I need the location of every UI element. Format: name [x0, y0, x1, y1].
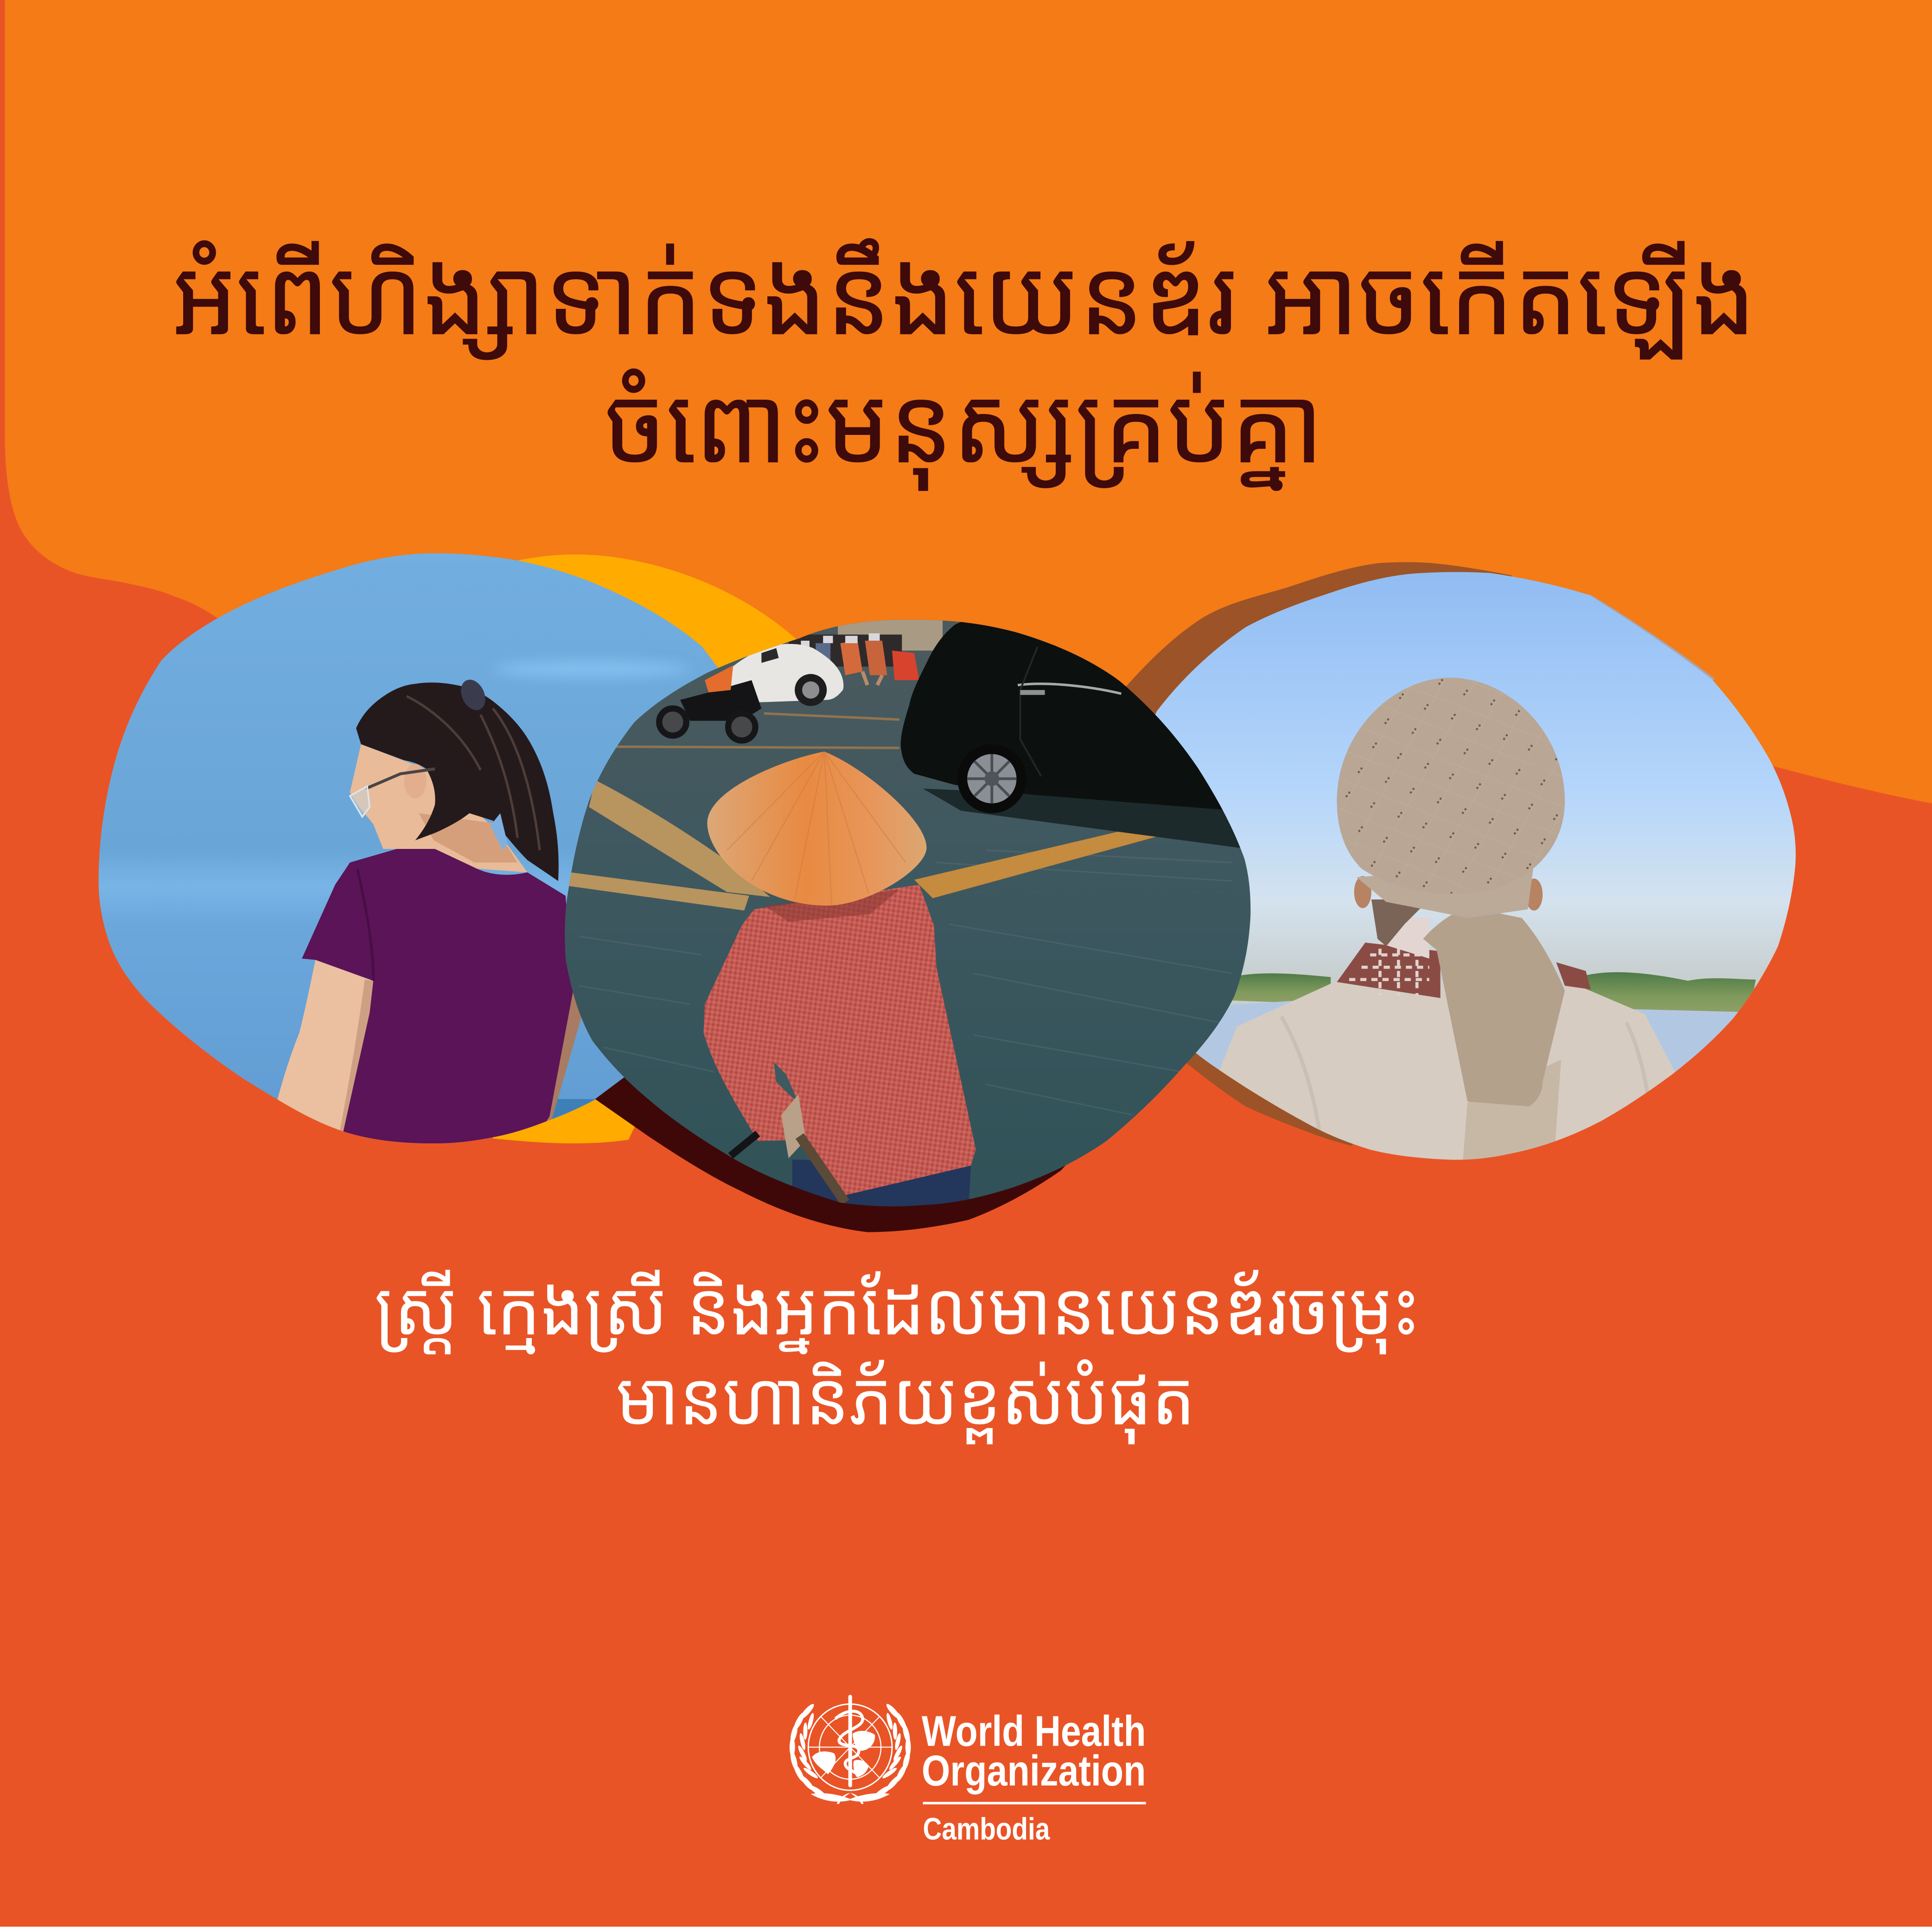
- scarf motifs: [1349, 949, 1429, 995]
- title line 2: ចំពោះមនុស្សគ្រប់គ្នា: [605, 367, 1323, 491]
- subtitle: [375, 1268, 1419, 1445]
- white car: [727, 644, 843, 706]
- rear wheel: [659, 708, 686, 736]
- photo: woman with ponytail: [86, 542, 727, 1158]
- t-shirt: [302, 849, 573, 1146]
- spokes: [967, 754, 1016, 803]
- car trim: [1018, 684, 1121, 694]
- accent blob: dark maroon: [595, 986, 1072, 1232]
- left wreath: [789, 1702, 890, 1804]
- accent blob: brown: [1109, 562, 1528, 1146]
- ear: [404, 764, 427, 798]
- window: [761, 648, 779, 663]
- hand: [781, 1094, 806, 1158]
- head wrap: [1337, 678, 1565, 893]
- rider orange: [865, 641, 887, 675]
- right arm: [530, 986, 581, 1128]
- ponytail highlights: [407, 696, 540, 850]
- gap between arm and body: [774, 1062, 798, 1103]
- ears: [1354, 876, 1371, 908]
- wheel: [795, 674, 827, 706]
- handle: [731, 1134, 758, 1156]
- grid lines: [808, 1716, 892, 1778]
- motorbike and rider: [659, 665, 761, 740]
- water: [1183, 998, 1774, 1090]
- Cambodia: Cambodia: [923, 1812, 1050, 1847]
- neck shadow: [419, 813, 517, 862]
- photo: woman in conical hat: [555, 603, 1290, 1214]
- pants: [792, 1160, 971, 1214]
- cloth tail lower: [1462, 1059, 1561, 1164]
- World Health: World Health: [922, 1707, 1146, 1755]
- shirt with check: [703, 885, 976, 1195]
- continents: [812, 1731, 875, 1777]
- rider red: [840, 641, 862, 675]
- tyre: [957, 744, 1027, 813]
- wrap band: [1357, 862, 1534, 918]
- road streaks: [579, 850, 1232, 1115]
- road markings: [589, 780, 770, 897]
- black car: [901, 603, 1290, 834]
- cloak shading: [1282, 1016, 1657, 1171]
- building: [838, 616, 943, 650]
- left arm: [274, 960, 373, 1140]
- sky band: [493, 660, 690, 678]
- title: [172, 238, 1756, 491]
- shadow under hat: [764, 890, 899, 922]
- scarf white: [1377, 918, 1429, 959]
- road line far: [616, 714, 899, 748]
- front wheel: [728, 714, 755, 740]
- hub: [802, 682, 819, 699]
- hair: [356, 682, 559, 881]
- scooter red: [892, 650, 919, 680]
- distant sea: [536, 1099, 595, 1126]
- rider light: [816, 643, 830, 665]
- helmets: [801, 633, 880, 648]
- subtitle line 1: ស្ត្រី ក្មេងស្រី និងអ្នកដែលមានយេនឌ័រចម្រុះ: [375, 1268, 1419, 1354]
- conical hat: [707, 752, 926, 905]
- door handle: [1020, 690, 1045, 695]
- stick: [800, 1136, 845, 1203]
- scarf pattern: [1337, 943, 1441, 998]
- cloth tail: [1423, 907, 1565, 1106]
- subtitle line 2: មានហានិភ័យខ្ពស់បំផុត: [616, 1358, 1195, 1445]
- wordmark: [922, 1707, 1146, 1847]
- arm shadow: [339, 980, 373, 1140]
- ear right: [1525, 879, 1543, 911]
- inner ring: [819, 1715, 881, 1779]
- road marking right: [914, 828, 1179, 898]
- right wreath: [811, 1702, 912, 1804]
- globe rings: [808, 1704, 892, 1790]
- accent blob: yellow: [493, 555, 801, 1143]
- cloak: [1207, 982, 1700, 1171]
- serpent: [835, 1711, 863, 1777]
- staff: [849, 1696, 851, 1785]
- car shadow: [923, 789, 1257, 850]
- sky gap by ponytail: [491, 813, 508, 850]
- glasses: [366, 769, 435, 789]
- Organization: Organization: [922, 1747, 1146, 1795]
- door seam: [1020, 647, 1041, 776]
- far bank left: [1232, 973, 1331, 1004]
- rider shirt: [705, 665, 733, 693]
- scrunchie: [456, 676, 490, 714]
- sleeve fold: [357, 869, 373, 981]
- wheel hub: [984, 772, 999, 786]
- logo rule: [923, 1802, 1146, 1804]
- orange top shape: [5, 0, 1932, 803]
- far bank right: [1583, 972, 1756, 1013]
- bottom white edge: [0, 1927, 1932, 1932]
- crowd on motorbikes: [789, 633, 919, 685]
- photo: woman with head wrap: [1072, 561, 1811, 1171]
- accent blob: gray sliver: [1587, 593, 1715, 690]
- emblem: [789, 1696, 912, 1804]
- neck: [1371, 899, 1429, 946]
- neck and face: [350, 744, 527, 873]
- legs: [862, 671, 882, 685]
- title line 1: អំពើហិង្សាទាក់ទងនឹងយេនឌ័រ អាចកើតឡើង: [172, 238, 1756, 360]
- lens: [350, 786, 370, 817]
- WHO logo: [789, 1696, 1146, 1847]
- alloy wheel: [967, 754, 1016, 803]
- road marking left: [568, 873, 749, 911]
- scarf right: [1556, 963, 1591, 989]
- hat ribs: [727, 752, 905, 905]
